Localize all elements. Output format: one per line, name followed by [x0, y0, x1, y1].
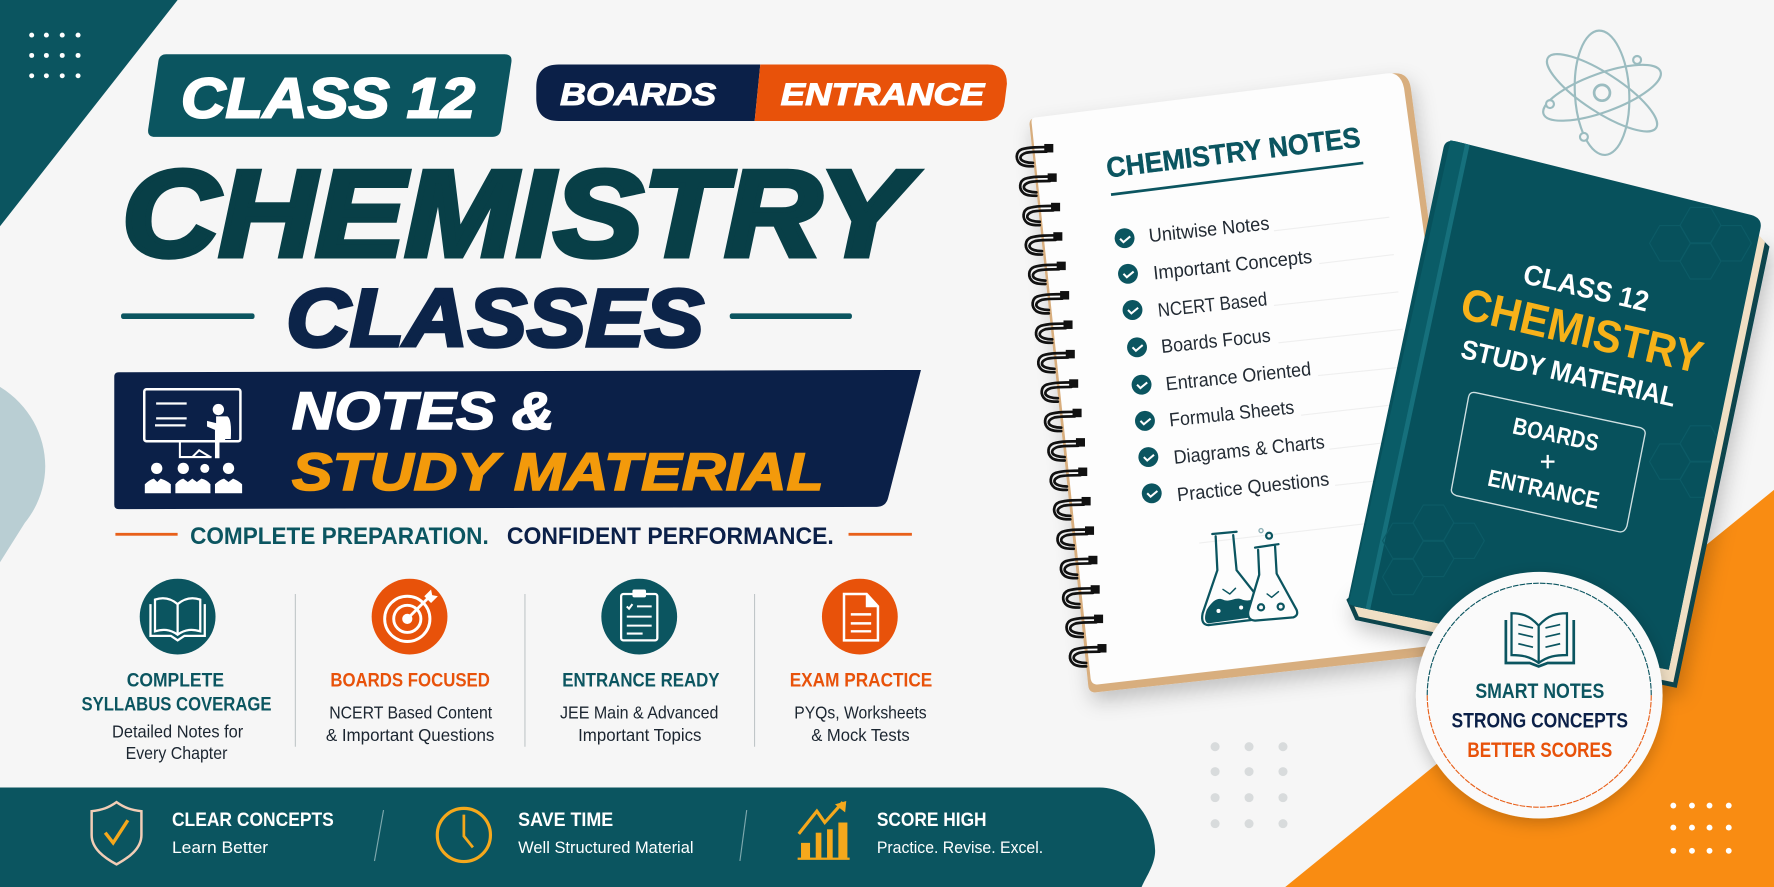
feature: entrance ready: Important Topics: [578, 725, 702, 745]
checklist: Diagrams & Charts: [1173, 432, 1326, 469]
feature: complete syllabus coverage: Detailed Notes for: [112, 722, 243, 742]
decor: pale left shape: [0, 387, 45, 562]
seal: smart notes: STRONG CONCEPTS: [1452, 709, 1628, 732]
tagline: CONFIDENT PERFORMANCE.: [507, 523, 834, 550]
feature: entrance ready: JEE Main & Advanced: [560, 702, 718, 722]
feature: entrance ready: ENTRANCE READY: [562, 671, 720, 692]
checklist: Entrance Oriented: [1165, 359, 1312, 395]
text: entrance: ENTRANCE: [781, 76, 985, 112]
text: boards: BOARDS: [560, 76, 716, 112]
tagline: [115, 523, 912, 550]
badge: class 12: [148, 54, 512, 137]
notebook title: CHEMISTRY NOTES: [1104, 121, 1362, 184]
icon: clock: [437, 808, 490, 862]
footer bar: Practice. Revise. Excel.: [877, 838, 1043, 857]
feature: complete syllabus coverage: COMPLETE: [127, 671, 224, 692]
book title: CLASS 12: [1520, 258, 1652, 317]
checklist: Important Concepts: [1152, 247, 1313, 284]
heading: classes: [121, 273, 852, 364]
notebook ruled lines: [1199, 217, 1423, 543]
checklist: Practice Questions: [1176, 469, 1330, 506]
feature: complete syllabus coverage: [81, 579, 272, 763]
heading: chemistry: CHEMISTRY: [122, 145, 919, 282]
feature: boards focused: & Important Questions: [326, 725, 495, 745]
feature: boards focused: NCERT Based Content: [329, 702, 492, 722]
book title: [1456, 258, 1708, 413]
decor: orange corner dots: [1670, 803, 1732, 854]
icon: shield: [92, 802, 141, 864]
feature: exam practice: & Mock Tests: [811, 725, 910, 745]
icon: open book: [140, 579, 216, 655]
feature: complete syllabus coverage: Every Chapter: [126, 743, 228, 763]
banner: notes and study material: [114, 370, 921, 509]
heading: classes: CLASSES: [286, 273, 704, 364]
feature: boards focused: [326, 579, 495, 745]
feature: exam practice: [790, 579, 932, 745]
feature: exam practice: EXAM PRACTICE: [790, 671, 932, 692]
footer bar: Well Structured Material: [518, 838, 694, 857]
feature: entrance ready: [560, 579, 720, 745]
decor: teal corner with dots: [0, 0, 178, 226]
seal: smart notes: BETTER SCORES: [1467, 739, 1612, 762]
text: save time: SAVE TIME: [518, 810, 613, 831]
text: study material: STUDY MATERIAL: [292, 443, 824, 502]
text: notes: NOTES &: [292, 382, 554, 441]
checklist: Unitwise Notes: [1148, 214, 1270, 247]
decor: orange triangle: [1285, 490, 1774, 887]
seal text: SMART NOTES: [1475, 680, 1604, 703]
feature: complete syllabus coverage: SYLLABUS COVERAGE: [81, 695, 272, 716]
icon: target: [372, 579, 447, 655]
icon: clipboard: [601, 579, 677, 655]
text: score high: SCORE HIGH: [877, 810, 987, 831]
book boards plus entrance box: ENTRANCE: [1485, 465, 1602, 515]
book title: CHEMISTRY: [1456, 278, 1708, 383]
icon: teacher and students: [144, 389, 242, 493]
book hexagon pattern: [1383, 207, 1751, 595]
tagline: COMPLETE PREPARATION.: [190, 523, 489, 550]
text: clear concepts: CLEAR CONCEPTS: [172, 810, 334, 831]
footer bar: Learn Better: [172, 838, 268, 857]
footer bar: [0, 787, 1155, 887]
icon: rising chart: [798, 801, 850, 860]
checklist: [1115, 214, 1330, 506]
book: [1346, 140, 1769, 688]
checklist: Boards Focus: [1160, 326, 1272, 358]
notebook: [1017, 73, 1487, 692]
notebook spiral rings: [1017, 147, 1106, 666]
checklist: NCERT Based: [1157, 289, 1268, 322]
decor: grey dots: [1211, 742, 1288, 828]
feature: boards focused: BOARDS FOCUSED: [330, 671, 490, 692]
text: class 12: CLASS 12: [181, 67, 475, 130]
icon: open book: [1506, 613, 1574, 666]
book boards plus entrance box: BOARDS: [1510, 413, 1601, 457]
icon: flasks: [1202, 529, 1297, 625]
feature: exam practice: PYQs, Worksheets: [794, 702, 927, 722]
icon: atom: [1537, 29, 1667, 156]
badge: boards and entrance pill: [536, 64, 1007, 121]
icon: document: [822, 579, 898, 655]
book boards plus entrance box: [1451, 392, 1645, 532]
book title: STUDY MATERIAL: [1458, 333, 1679, 413]
dividers: [295, 594, 755, 747]
seal: smart notes: [1416, 572, 1663, 819]
checklist: Formula Sheets: [1168, 397, 1295, 432]
